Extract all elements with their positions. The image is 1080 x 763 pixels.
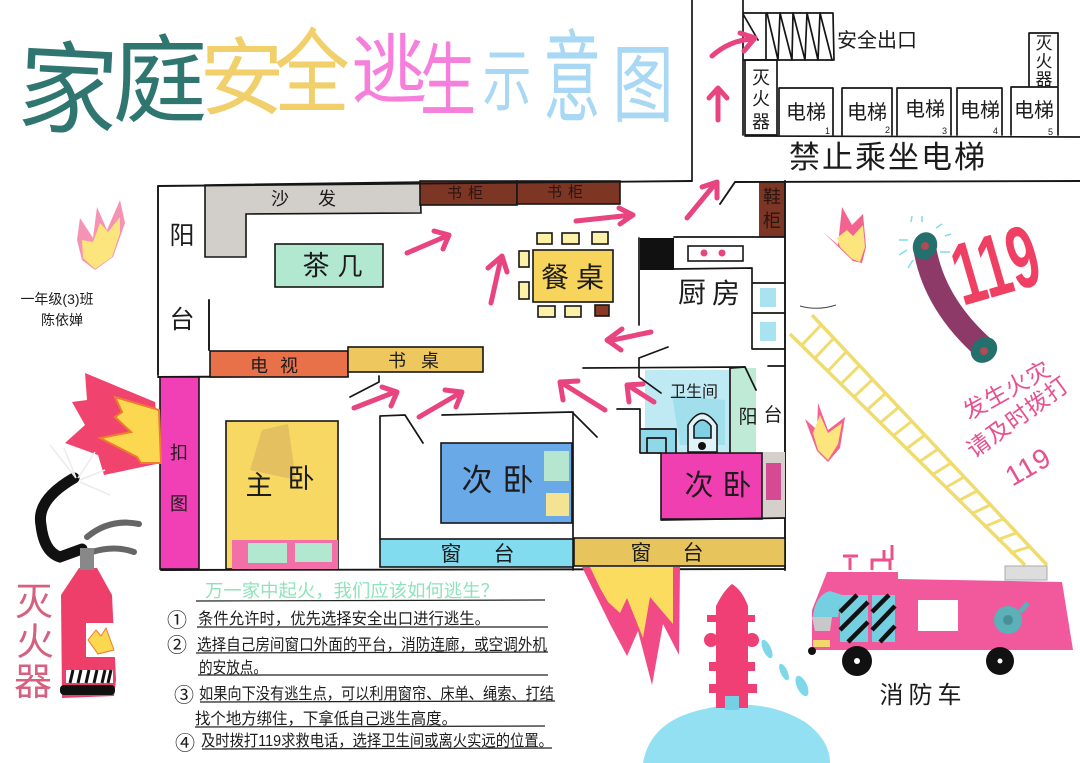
- label: extinguisher: 灭: [15, 582, 53, 624]
- sofa: [205, 182, 421, 257]
- desk: [348, 347, 483, 372]
- dining table: [519, 232, 613, 317]
- author note: [20, 291, 94, 328]
- balcony label: 阳: [169, 222, 195, 250]
- master bed: 主: [246, 471, 272, 501]
- escape instructions: ②: [167, 634, 187, 657]
- author note: 一年级(3)班: [20, 291, 94, 307]
- labels: elevators: 3: [942, 126, 947, 136]
- escape instructions: ①: [167, 609, 187, 632]
- labels: elevators: 电梯: [1014, 99, 1054, 122]
- shoe cabinet: 柜: [763, 211, 781, 231]
- balcony label: 台: [169, 306, 195, 334]
- flame: left large: [65, 373, 161, 475]
- flame: right lower: [805, 403, 845, 462]
- entry strip: 扣: [170, 443, 188, 463]
- entry strip: [160, 377, 199, 569]
- blue bed: [441, 443, 572, 523]
- labels: elevators: 1: [825, 126, 830, 136]
- title: 庭: [112, 29, 208, 135]
- escape instructions: 如果向下没有逃生点，可以利用窗帘、床单、绳索、打结: [199, 685, 554, 703]
- second bedroom walls: [350, 376, 597, 570]
- fire truck: [808, 545, 1073, 676]
- sofa: 发: [318, 189, 336, 209]
- label: extinguisher box left: 器: [752, 112, 770, 132]
- bookcases: [420, 181, 620, 205]
- tea table: 几: [337, 253, 363, 281]
- pink bedroom: 次: [684, 469, 714, 502]
- tea table: [275, 244, 383, 287]
- kitchen: 房: [712, 278, 740, 309]
- escape instructions: 选择自己房间窗口外面的平台，消防连廊，或空调外机: [197, 636, 547, 654]
- bay window left: 台: [494, 543, 514, 566]
- kitchen: 厨: [678, 277, 706, 308]
- flame: bottom centre: [582, 567, 680, 685]
- dining table: 餐: [541, 262, 569, 293]
- bay window right: 窗: [630, 542, 652, 565]
- labels: elevators: 电梯: [786, 101, 826, 124]
- toilet: [688, 414, 717, 452]
- sofa: 沙: [271, 189, 289, 209]
- call message: [959, 355, 1074, 492]
- flame: upper left small: [77, 200, 125, 270]
- escape instructions: 及时拨打119求救电话，选择卫生间或离火实远的位置。: [201, 732, 553, 750]
- bookcases: 书柜: [547, 184, 589, 201]
- title: 意: [543, 24, 601, 135]
- blue bed: 卧: [502, 463, 534, 498]
- escape instructions: 条件允许时，优先选择安全出口进行逃生。: [198, 610, 490, 628]
- bathroom: 卫生间: [670, 383, 718, 401]
- heading: 万一家中起火，我们应该如何逃生？: [205, 581, 499, 601]
- title: 安: [199, 32, 285, 127]
- tv: 视: [280, 356, 298, 376]
- labels: elevators: 4: [993, 126, 998, 136]
- blue bed: 次: [462, 463, 492, 498]
- master bed: 卧: [288, 464, 314, 494]
- master bed: [226, 421, 338, 569]
- labels: elevators: 2: [885, 125, 890, 135]
- pink bedroom: 卧: [722, 469, 752, 502]
- shoe cabinet: [759, 182, 785, 237]
- label: safe exit: 安全出口: [837, 29, 917, 52]
- label: do not use elevators: 禁止乘坐电梯: [789, 140, 987, 175]
- shoe cabinet: 鞋: [763, 187, 781, 207]
- water droplets: [759, 638, 811, 698]
- desk: 书: [388, 351, 406, 371]
- label: extinguisher box right: 器: [1036, 70, 1052, 89]
- title: 家: [15, 33, 121, 150]
- bay window left: [380, 539, 573, 567]
- title: 逃: [351, 29, 427, 114]
- escape instructions: 找个地方绑住，下拿低自己逃生高度。: [195, 709, 457, 728]
- stairwell area: exit and elevators: [692, 0, 1080, 180]
- side balcony label: [738, 404, 783, 428]
- label: extinguisher: [14, 582, 54, 704]
- label: extinguisher box left: 火: [752, 89, 770, 109]
- kitchen: [639, 237, 785, 349]
- outer walls: [158, 181, 1080, 570]
- bay window left: 窗: [440, 543, 462, 566]
- escape instructions: ④: [175, 732, 195, 755]
- labels: elevators: 电梯: [960, 99, 1000, 122]
- call message: 请及时拨打: [962, 371, 1074, 463]
- desk: 桌: [421, 351, 439, 371]
- telephone receiver: [899, 216, 1002, 368]
- label: fire truck: 消防车: [880, 682, 966, 709]
- label: extinguisher box left: [752, 68, 770, 132]
- dining table: 桌: [576, 262, 604, 293]
- label: extinguisher box right: 火: [1036, 52, 1052, 71]
- bay window right: [574, 538, 785, 566]
- fire extinguisher: [40, 445, 139, 698]
- labels: elevators: 电梯: [905, 98, 945, 121]
- bookcases: 书柜: [447, 185, 489, 202]
- title: 图: [612, 38, 674, 133]
- floor plan: [158, 181, 1080, 570]
- entry strip: 图: [170, 494, 188, 514]
- tv: 电: [250, 356, 268, 376]
- labels: elevators: 5: [1048, 127, 1053, 137]
- side balcony label: 阳: [738, 406, 758, 428]
- tea table: 茶: [302, 251, 330, 281]
- call message: 发生火灾: [959, 355, 1055, 425]
- title: [15, 22, 674, 150]
- bay window right: 台: [682, 542, 704, 565]
- balcony label: [169, 222, 195, 334]
- escape instructions: ③: [174, 684, 194, 707]
- label: extinguisher: 器: [14, 662, 52, 704]
- call message: 119: [1000, 441, 1057, 492]
- labels: elevators: [786, 98, 1054, 137]
- title: 生: [420, 36, 476, 126]
- ladder: [790, 305, 1047, 565]
- label: extinguisher box right: [1036, 34, 1052, 89]
- bathroom: [583, 347, 785, 453]
- pink bedroom: [661, 452, 785, 520]
- fire hydrant: [704, 584, 759, 710]
- label: extinguisher: 火: [16, 622, 54, 664]
- title: 全: [274, 22, 350, 125]
- title: 示: [483, 43, 531, 120]
- escape instructions: 的安放点。: [199, 659, 267, 677]
- label: extinguisher box left: 灭: [752, 68, 770, 88]
- flame: right upper: [823, 207, 866, 263]
- escape instructions: [167, 581, 555, 755]
- labels: elevators: 电梯: [847, 101, 887, 124]
- escape arrows: [354, 33, 755, 417]
- side balcony label: 台: [763, 404, 783, 426]
- water pool: [643, 705, 830, 763]
- tv: [210, 351, 348, 377]
- label: extinguisher box right: 灭: [1036, 34, 1052, 53]
- author note: 陈依婵: [41, 312, 83, 328]
